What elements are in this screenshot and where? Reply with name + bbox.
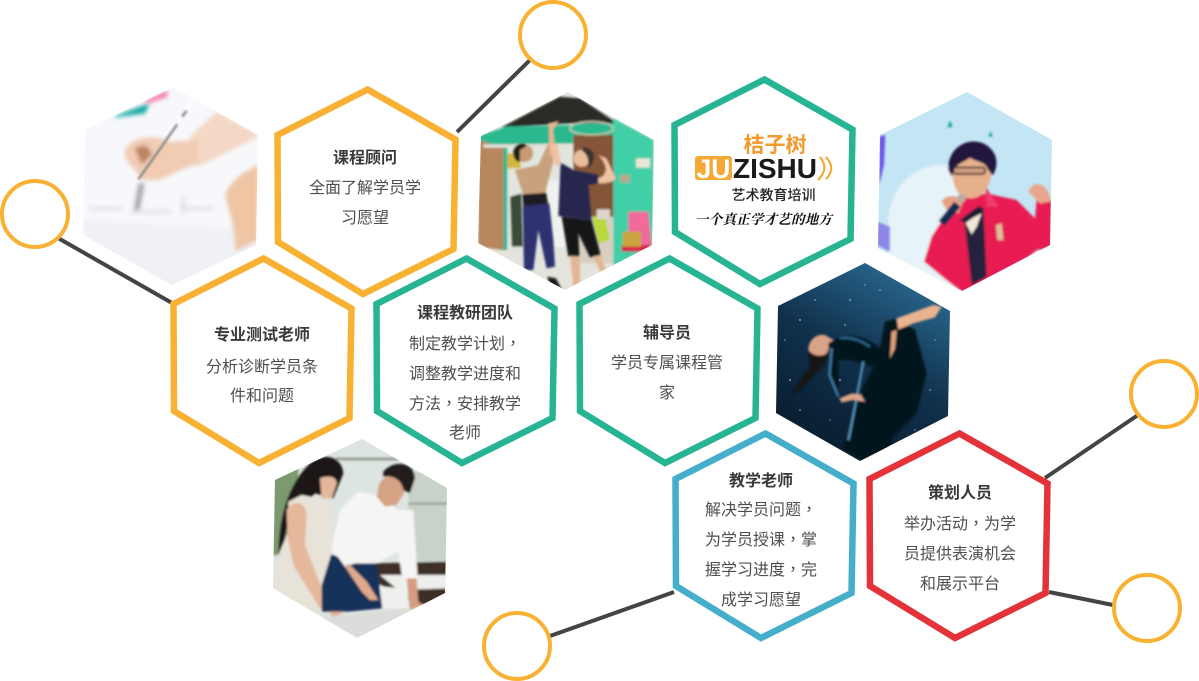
panel: 策划人员: 和展示平台 [920, 575, 1000, 593]
logo sound arcs [818, 157, 831, 180]
logo badge JU: JU [696, 154, 730, 184]
photo: two dancers in studio [476, 90, 656, 292]
panel: 专业测试老师: 分析诊断学员条 [206, 358, 318, 376]
panel: 课程教研团队: 调整教学进度和 [409, 365, 521, 383]
panel: 教学老师: 为学员授课，掌 [705, 526, 817, 550]
panel: 教学老师: 握学习进度，完 [705, 556, 817, 580]
man [515, 143, 553, 195]
panel: 课程顾问 [278, 90, 456, 294]
logo heading: 桔子树 [744, 134, 806, 157]
logo subtitle: 艺术教育培训 [732, 187, 816, 203]
photo: man and woman at a desk [270, 436, 452, 641]
panel: 辅导员: 家 [659, 384, 675, 402]
panel: 专业测试老师 [174, 258, 352, 463]
panel: 辅导员: 辅导员 [643, 323, 691, 342]
logo slogan: 一个真正学才艺的地方 [695, 212, 834, 227]
panel: 课程教研团队: 方法，安排教学 [409, 390, 521, 414]
woman [550, 143, 562, 165]
photo: dancer in rain [772, 260, 954, 464]
panel: 专业测试老师: 专业测试老师 [214, 326, 310, 344]
panel: 教学老师: 解决学员问题， [705, 496, 817, 520]
panel: 课程教研团队: 制定教学计划， [409, 330, 521, 354]
panel: 课程顾问: 全面了解学员学 [309, 179, 421, 197]
panel: 专业测试老师: 件和问题 [230, 387, 294, 405]
panel: 课程教研团队: 课程教研团队 [417, 303, 513, 322]
panel: 策划人员: 策划人员 [928, 483, 992, 502]
panel: 课程教研团队 [376, 258, 554, 463]
panel: 课程顾问: 习愿望 [341, 209, 389, 227]
panel: 教学老师: 教学老师 [729, 471, 793, 490]
panel: 辅导员 [580, 258, 758, 463]
panel: 桔子树 logo [674, 80, 852, 284]
panel: 教学老师: 成学习愿望 [721, 591, 801, 609]
panel: 策划人员 [870, 434, 1048, 638]
photo: boy singing in red jacket [875, 90, 1055, 298]
logo wordmark ZISHU: ZISHU [733, 153, 817, 184]
panel: 辅导员: 学员专属课程管 [611, 354, 723, 372]
panel: 策划人员: 举办活动，为学 [904, 510, 1016, 534]
panel: 课程教研团队: 老师 [449, 424, 481, 442]
connector lines [58, 60, 1138, 636]
panel: 教学老师 [676, 434, 854, 638]
photo: hand writing [80, 85, 260, 293]
panel: 策划人员: 员提供表演机会 [904, 545, 1016, 563]
panel: 课程顾问: 课程顾问 [333, 149, 397, 167]
